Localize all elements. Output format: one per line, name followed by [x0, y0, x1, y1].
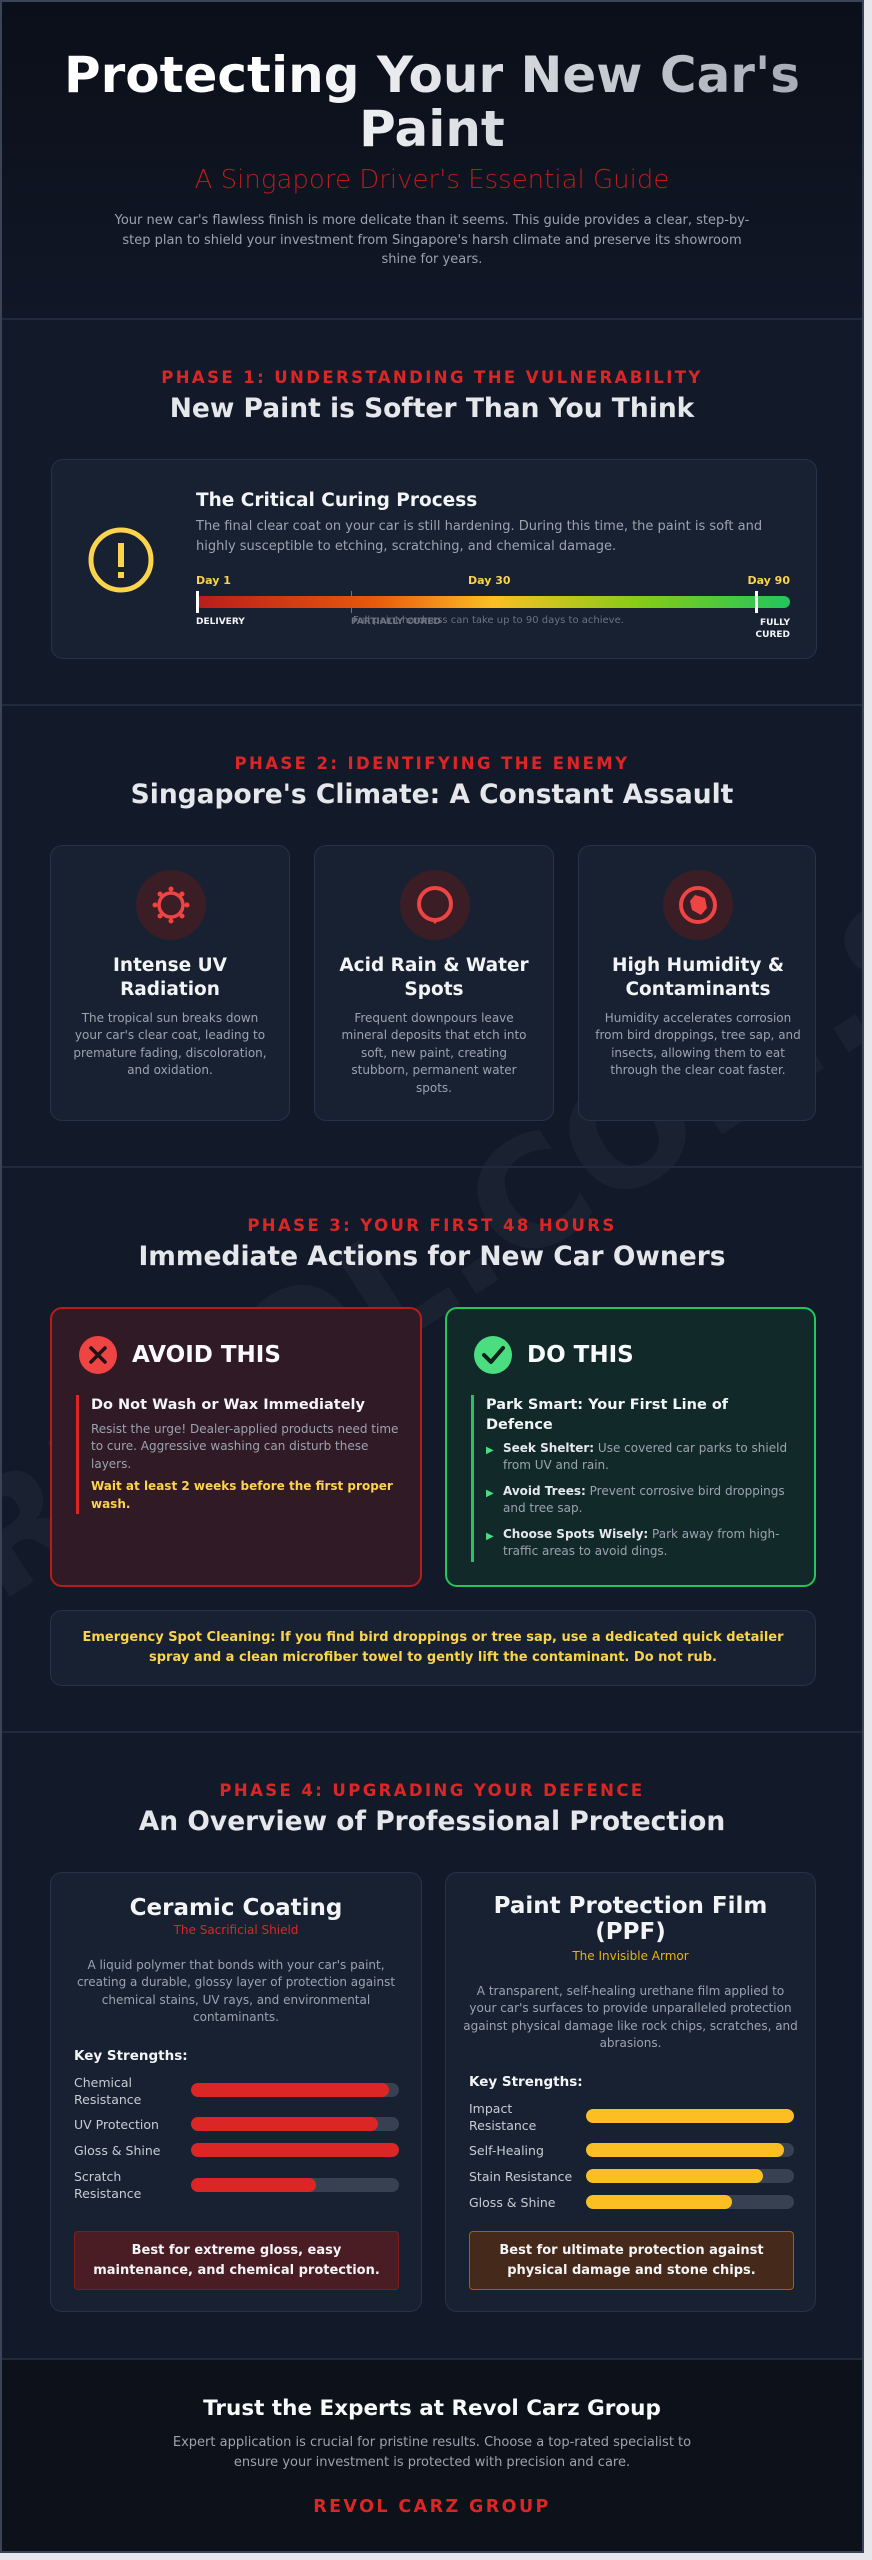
do item: ▶	[486, 1445, 494, 1456]
curing text: The final clear coat on your car is still hardening. During this time, the paint is soft and highly susceptible to etching, scratching, and chemical damage.	[196, 519, 762, 554]
ppf subtitle: The Invisible Armor	[572, 1949, 689, 1963]
humidity text: Humidity accelerates corrosion from bird droppings, tree sap, and insects, allowing them to eat through the clear coat faster.	[595, 1011, 801, 1077]
timeline: PARTIALLY CURED	[351, 617, 441, 627]
timeline: Day 90	[747, 574, 790, 587]
phase 1 heading: New Paint is Softer Than You Think	[170, 393, 694, 424]
phase 3 label: PHASE 3: YOUR FIRST 48 HOURS	[247, 1216, 617, 1235]
icon: warning	[88, 528, 154, 592]
humidity title	[612, 955, 784, 1000]
panel: phase 3	[50, 1216, 816, 1686]
avoid item	[76, 1395, 406, 1514]
avoid item: Wait at least 2 weeks before the first proper wash.	[91, 1479, 393, 1511]
avoid item: Do Not Wash or Wax Immediately	[91, 1397, 365, 1413]
ceramic title: Ceramic Coating	[130, 1895, 342, 1921]
ceramic strengths chart: Gloss & Shine	[74, 2143, 160, 2158]
phase 1 label: PHASE 1: UNDERSTANDING THE VULNERABILITY	[161, 368, 703, 387]
timeline: Day 30	[468, 574, 511, 587]
timeline: Full paint hardness can take up to 90 days to achieve.	[353, 615, 624, 626]
do card	[445, 1307, 816, 1587]
title: Protecting Your New Car's	[64, 46, 800, 104]
phase 2 heading: Singapore's Climate: A Constant Assault	[131, 779, 733, 810]
ceramic strengths chart: Resistance	[74, 2186, 141, 2201]
ceramic verdict: Best for extreme gloss, easy maintenance, and chemical protection.	[93, 2243, 380, 2278]
icon: sun	[136, 870, 206, 940]
title: Paint	[359, 100, 505, 158]
avoid card	[50, 1307, 422, 1587]
do item: ▶	[486, 1488, 494, 1499]
timeline: CURED	[756, 630, 790, 640]
UV title	[113, 955, 227, 1000]
ceramic strengths chart: Scratch	[74, 2169, 121, 2184]
icon: drop	[400, 870, 470, 940]
ppf title: Paint Protection Film	[494, 1893, 767, 1919]
timeline: DELIVERY	[196, 617, 245, 627]
ceramic verdict	[74, 2231, 399, 2290]
phase 4 heading: An Overview of Professional Protection	[139, 1806, 725, 1837]
ceramic strengths chart: Chemical	[74, 2075, 132, 2090]
do item: Park Smart: Your First Line of Defence	[486, 1397, 728, 1433]
humidity title: Contaminants	[625, 979, 771, 1000]
emergency callout: Emergency Spot Cleaning: If you find bird droppings or tree sap, use a dedicated quick detailer spray and a clean microfiber towel to gently lift the contaminant. Do not rub.	[82, 1630, 784, 1665]
curing title: The Critical Curing Process	[196, 490, 477, 511]
card: acid rain	[314, 845, 554, 1121]
icon: cross	[79, 1336, 117, 1374]
ppf title	[494, 1893, 767, 1945]
avoid item: Resist the urge! Dealer-applied products need time to cure. Aggressive washing can disturb these layers.	[91, 1422, 398, 1471]
timeline: FULLY	[760, 618, 790, 628]
ceramic card	[50, 1872, 422, 2312]
card: UV	[50, 845, 290, 1121]
avoid heading: AVOID THIS	[132, 1342, 281, 1368]
card: humidity	[578, 845, 816, 1121]
acid title: Spots	[404, 979, 464, 1000]
header	[2, 2, 862, 318]
ppf strengths chart: Key Strengths:	[469, 2074, 583, 2090]
UV text: The tropical sun breaks down your car's clear coat, leading to premature fading, discoloration, and oxidation.	[73, 1011, 267, 1077]
UV title: Radiation	[120, 979, 220, 1000]
humidity title: High Humidity &	[612, 955, 784, 976]
icon: contaminant	[663, 870, 733, 940]
ceramic text: A liquid polymer that bonds with your car's paint, creating a durable, glossy layer of protection against chemical stains, UV rays, and environmental contaminants.	[77, 1958, 395, 2024]
ppf card	[445, 1872, 816, 2312]
icon: check	[474, 1336, 512, 1374]
ceramic strengths chart: UV Protection	[74, 2117, 159, 2132]
ppf verdict	[469, 2231, 794, 2290]
do item: Seek Shelter: Use covered car parks to shield from UV and rain.	[503, 1441, 787, 1472]
footer	[2, 2360, 862, 2553]
timeline: Day 1	[196, 574, 231, 587]
acid title	[339, 955, 529, 1000]
ppf title: (PPF)	[595, 1919, 666, 1945]
footer heading: Trust the Experts at Revol Carz Group	[203, 2396, 661, 2421]
panel: phase 4	[50, 1781, 816, 2312]
panel: phase 1	[51, 368, 817, 659]
ppf strengths chart: Stain Resistance	[469, 2169, 572, 2184]
intro text: Your new car's flawless finish is more delicate than it seems. This guide provides a clear, step-by-step plan to shield your investment from Singapore's harsh climate and preserve its showroom shine for years.	[115, 213, 749, 267]
phase 4 label: PHASE 4: UPGRADING YOUR DEFENCE	[219, 1781, 645, 1800]
do item	[471, 1395, 801, 1562]
do heading: DO THIS	[527, 1342, 634, 1368]
ppf strengths chart: Self-Healing	[469, 2143, 544, 2158]
ceramic strengths chart: Key Strengths:	[74, 2048, 188, 2064]
acid title: Acid Rain & Water	[339, 955, 529, 976]
acid text: Frequent downpours leave mineral deposits that etch into soft, new paint, creating stubborn, permanent water spots.	[341, 1011, 527, 1095]
subtitle: A Singapore Driver's Essential Guide	[195, 165, 669, 195]
ppf strengths chart: Resistance	[469, 2118, 536, 2133]
ppf verdict: Best for ultimate protection against physical damage and stone chips.	[499, 2243, 764, 2278]
do item: Choose Spots Wisely: Park away from high-traffic areas to avoid dings.	[503, 1527, 779, 1558]
panel: phase 2	[50, 754, 816, 1121]
emergency callout	[50, 1610, 816, 1686]
do item: ▶	[486, 1531, 494, 1542]
phase 3 heading: Immediate Actions for New Car Owners	[138, 1241, 726, 1272]
ppf strengths chart	[469, 2074, 794, 2210]
title	[2, 48, 862, 156]
ceramic subtitle: The Sacrificial Shield	[174, 1923, 298, 1937]
timeline	[196, 574, 790, 640]
footer text: Expert application is crucial for pristine results. Choose a top-rated specialist to ensure your investment is protected with precision and care.	[173, 2435, 691, 2470]
ppf strengths chart: Gloss & Shine	[469, 2195, 555, 2210]
footer brand: REVOL CARZ GROUP	[313, 2497, 551, 2517]
curing card	[51, 459, 817, 659]
ppf strengths chart: Impact	[469, 2101, 512, 2116]
ceramic strengths chart	[74, 2048, 399, 2201]
do item: Avoid Trees: Prevent corrosive bird droppings and tree sap.	[503, 1484, 785, 1515]
ceramic strengths chart: Resistance	[74, 2092, 141, 2107]
UV title: Intense UV	[113, 955, 227, 976]
ppf text: A transparent, self-healing urethane film applied to your car's surfaces to provide unparalleled protection against physical damage like rock chips, scratches, and abrasions.	[463, 1984, 798, 2050]
phase 2 label: PHASE 2: IDENTIFYING THE ENEMY	[235, 754, 629, 773]
